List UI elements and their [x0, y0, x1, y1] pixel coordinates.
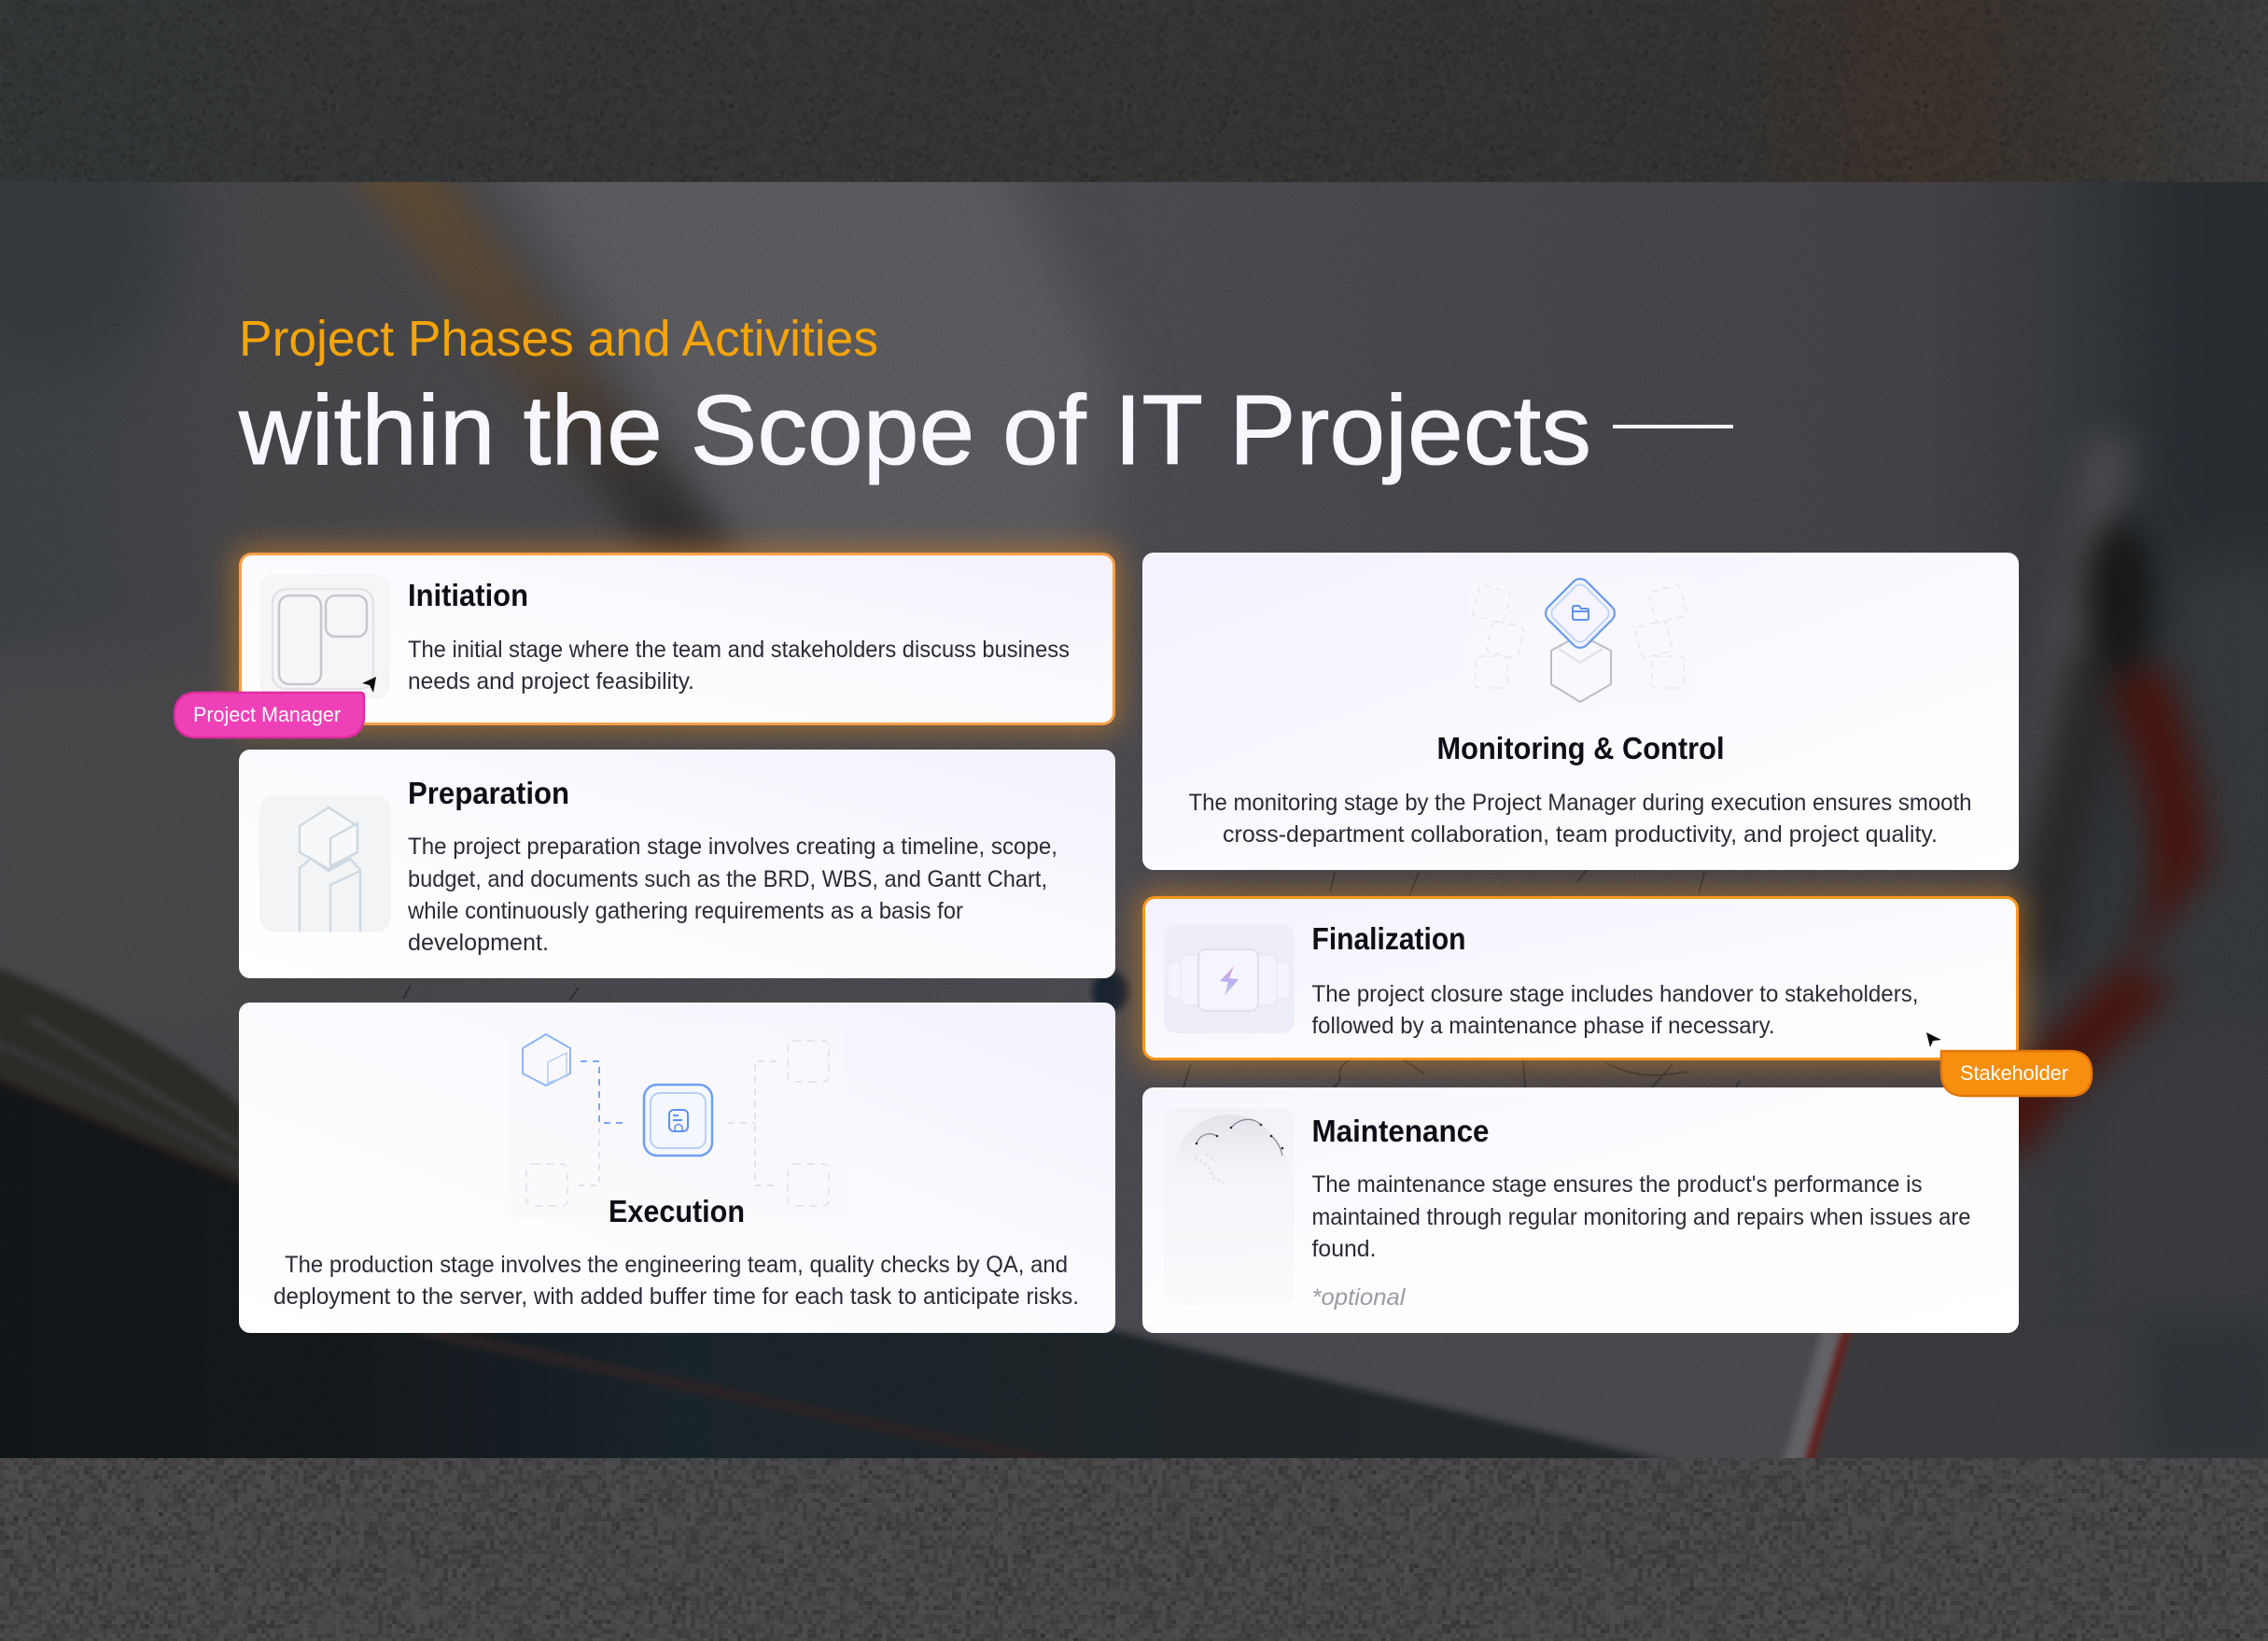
- heading: Monitoring & Control: [1437, 731, 1725, 765]
- description: The maintenance stage ensures the product's performance is: [1312, 1171, 1923, 1198]
- panel: execution: [239, 1003, 1115, 1333]
- heading: Preparation: [408, 776, 569, 810]
- description: followed by a maintenance phase if necessary.: [1312, 1013, 1775, 1039]
- description: The monitoring stage by the Project Manager during execution ensures smooth: [1189, 790, 1971, 816]
- description: The production stage involves the engineering team, quality checks by QA, and: [285, 1252, 1068, 1278]
- panel: monitoring and control: [1142, 553, 2019, 870]
- panel: finalization: [1144, 898, 2018, 1059]
- background: top noise band: [0, 0, 2268, 182]
- heading: Maintenance: [1312, 1114, 1490, 1148]
- icon: globe: [1164, 1108, 1295, 1305]
- description: cross-department collaboration, team productivity, and project quality.: [1223, 821, 1938, 848]
- heading dash: [1613, 425, 1733, 428]
- description: The project closure stage includes handover to stakeholders,: [1312, 981, 1919, 1007]
- description: while continuously gathering requirements as a basis for: [407, 898, 963, 924]
- icon: stacked hexagon blocks: [259, 795, 391, 933]
- description: [1189, 790, 1971, 848]
- panel: maintenance: [1142, 1087, 2019, 1333]
- icon: cards with lightning bolt: [1164, 924, 1295, 1033]
- background: film grain: [0, 182, 2268, 1458]
- description: needs and project feasibility.: [408, 668, 694, 694]
- heading: Finalization: [1312, 921, 1465, 956]
- subtitle: Project Phases and Activities: [239, 311, 878, 367]
- description: deployment to the server, with added buffer time for each task to anticipate risks.: [273, 1283, 1079, 1310]
- badge: stakeholder: Stakeholder: [1960, 1061, 2068, 1085]
- icon: layout panels: [259, 574, 390, 699]
- description: The project preparation stage involves creating a timeline, scope,: [408, 834, 1057, 860]
- background: bottom noise band: [0, 1458, 2268, 1641]
- description: found.: [1312, 1236, 1376, 1262]
- description: [408, 637, 1070, 694]
- heading: Initiation: [408, 578, 528, 612]
- cursor: project manager: [362, 677, 376, 693]
- description: budget, and documents such as the BRD, WBS, and Gantt Chart,: [408, 866, 1047, 892]
- description: maintained through regular monitoring and repairs when issues are: [1312, 1204, 1971, 1230]
- description: [1312, 981, 1919, 1039]
- sharp lower foreground of the photo: [0, 966, 2125, 1458]
- icon: node flow diagram: [511, 1022, 845, 1218]
- badge: stakeholder: [1941, 1051, 2092, 1096]
- main heading: within the Scope of IT Projects: [238, 375, 1591, 485]
- description: The initial stage where the team and stakeholders discuss business: [408, 637, 1070, 663]
- panel: preparation: [239, 750, 1115, 978]
- description: [1312, 1171, 1971, 1262]
- optional note: *optional: [1312, 1284, 1407, 1311]
- panel: initiation: [241, 554, 1114, 724]
- highlight glows: [233, 547, 2024, 1066]
- handwriting glimpses between the cards: [403, 870, 1740, 1087]
- heading: Execution: [609, 1194, 745, 1228]
- title block: [238, 311, 1733, 485]
- cursor: stakeholder: [1926, 1032, 1941, 1047]
- badge: project manager: [175, 693, 364, 737]
- badge: project manager: Project Manager: [193, 703, 341, 726]
- description: [407, 834, 1057, 956]
- icon: diamond and hexagon stack: [1468, 574, 1692, 708]
- description: [273, 1252, 1079, 1310]
- description: development.: [408, 930, 549, 956]
